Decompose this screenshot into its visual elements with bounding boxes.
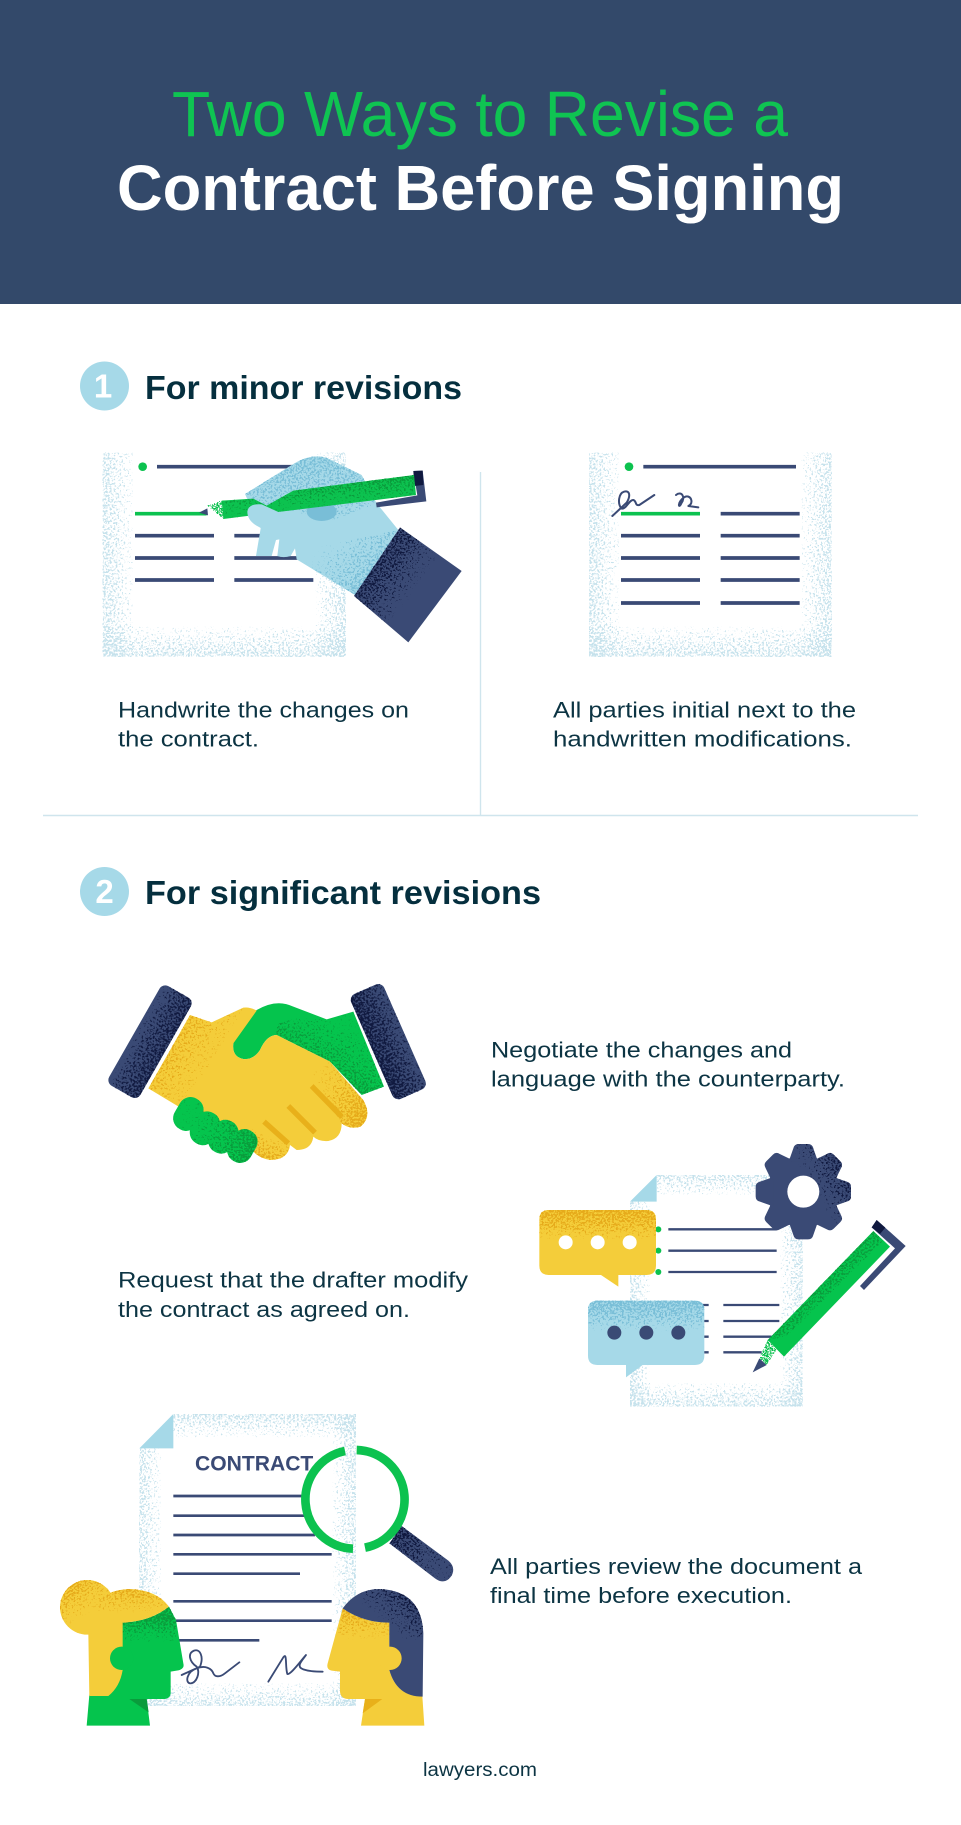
- thumb: [247, 504, 302, 540]
- header banner: [0, 0, 961, 304]
- woman profile: [60, 1580, 184, 1726]
- caption: negotiate: language with the counterparty.: [491, 1067, 845, 1092]
- paper fold: [630, 1175, 657, 1202]
- caption: request: Request that the drafter modify: [118, 1268, 468, 1293]
- caption: request: [118, 1268, 468, 1322]
- caption: initial: [553, 698, 856, 752]
- caption: negotiate: Negotiate the changes and: [491, 1038, 792, 1063]
- section 2 heading: 2: [95, 873, 114, 910]
- green sleeve and hand: [233, 1003, 384, 1095]
- caption: initial: All parties initial next to the: [553, 698, 856, 723]
- right cuff: [349, 982, 428, 1101]
- caption: handwrite: Handwrite the changes on: [118, 698, 409, 723]
- green fingers: [173, 1097, 258, 1163]
- section 2 heading: [80, 867, 541, 916]
- caption: final review: [490, 1554, 863, 1608]
- man profile: [327, 1589, 424, 1726]
- pen: [199, 471, 426, 519]
- section 1 heading: 1: [94, 368, 112, 404]
- contract text lines: [621, 467, 800, 603]
- title line 1: Two Ways to Revise a: [172, 78, 788, 150]
- illustration: reviewing the contract: [60, 1414, 453, 1726]
- paper with speckled edge: [103, 453, 346, 657]
- caption: handwrite: the contract.: [118, 727, 259, 752]
- paper with speckled edge: [139, 1414, 356, 1706]
- title line 2: Contract Before Signing: [117, 152, 844, 224]
- gear: [753, 1140, 853, 1240]
- caption: handwrite: [118, 698, 409, 752]
- contract text lines: [135, 467, 313, 580]
- illustration: initialed contract: [589, 453, 832, 657]
- blue speech bubble: [588, 1301, 704, 1377]
- left cuff: [106, 983, 194, 1100]
- section 1 heading: For minor revisions: [145, 369, 462, 406]
- contract lines: [173, 1496, 332, 1640]
- vertical and horizontal rules: [43, 472, 918, 816]
- green line: [621, 508, 700, 519]
- illustration: handshake: [106, 982, 428, 1167]
- yellow speech bubble: [539, 1210, 656, 1287]
- hand: [245, 456, 398, 595]
- magnifying glass: [305, 1450, 453, 1581]
- handwritten initials: [612, 491, 698, 516]
- green bullet: [625, 462, 633, 471]
- caption: request: the contract as agreed on.: [118, 1297, 410, 1322]
- contract label: CONTRACT: [195, 1452, 313, 1476]
- footer source: lawyers.com: [423, 1760, 537, 1781]
- bullets: [655, 1226, 661, 1275]
- section 1 heading: [80, 362, 462, 410]
- shirt cuff: [354, 527, 462, 642]
- signatures: [182, 1650, 323, 1683]
- finger creases: [264, 1086, 342, 1143]
- paper with speckled edge: [589, 453, 832, 657]
- caption: final review: final time before execution.: [490, 1583, 792, 1608]
- caption: initial: handwritten modifications.: [553, 727, 852, 752]
- yellow hand: [148, 1007, 367, 1160]
- illustration: hand writing on contract: [103, 453, 462, 657]
- pen: [753, 1220, 906, 1372]
- green bullet: [138, 462, 147, 471]
- caption: negotiate: [491, 1038, 845, 1092]
- paper with speckled edge: [630, 1175, 803, 1407]
- section 2 heading: For significant revisions: [145, 874, 541, 911]
- paper fold: [139, 1414, 173, 1448]
- illustration: drafting with speech bubbles: [539, 1140, 906, 1407]
- caption: final review: All parties review the document a: [490, 1554, 863, 1579]
- text lines: [668, 1229, 779, 1352]
- handwritten green line: [135, 508, 207, 519]
